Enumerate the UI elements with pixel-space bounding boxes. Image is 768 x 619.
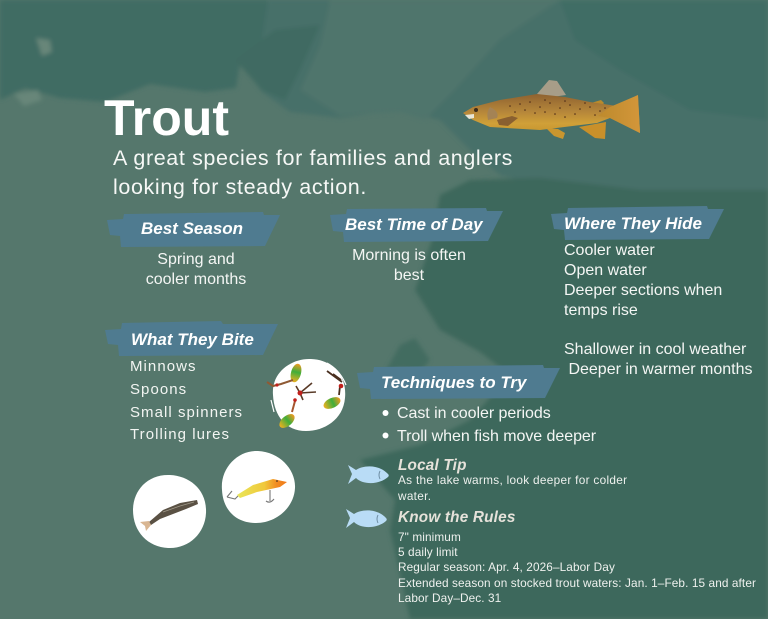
image: minnow	[133, 475, 206, 548]
text: where they hide: temps rise	[564, 302, 638, 319]
text: local tip: water.	[398, 488, 431, 502]
banner: where they hide	[551, 206, 724, 240]
heading: best season: Best Season	[141, 219, 243, 238]
text: best time of day: Morning is often	[352, 247, 466, 264]
text: seasonal depth: Deeper in warmer months	[568, 361, 753, 378]
text: where they hide: Open water	[564, 262, 647, 279]
text: know the rules: Labor Day–Dec. 31	[398, 591, 501, 605]
list: techniques: Troll when fish move deeper	[397, 428, 596, 444]
list: lures	[130, 358, 243, 443]
image: lure	[222, 451, 296, 523]
text: where they hide: Cooler water	[564, 242, 655, 259]
bullets	[382, 410, 388, 438]
text: local tip: As the lake warms, look deeper for colder	[398, 473, 627, 487]
text: know the rules: Regular season: Apr. 4, 2026–Labor Day	[398, 560, 615, 574]
icon: fish, know the rules	[346, 509, 387, 528]
heading: know the rules: Know the Rules	[398, 509, 516, 526]
panel: techniques to try	[357, 365, 596, 444]
banner: best season	[107, 212, 280, 247]
list: lures: Trolling lures	[130, 426, 230, 443]
text: best season: Spring and	[157, 251, 235, 268]
text: seasonal depth: Shallower in cool weather	[564, 341, 746, 358]
text: seasonal depth	[564, 341, 753, 378]
title: Trout	[104, 90, 229, 146]
text: best season: cooler months	[146, 271, 246, 288]
list: techniques	[397, 405, 596, 444]
illustration: brown trout	[463, 80, 640, 139]
banner: what they bite	[105, 321, 278, 356]
list: lures: Spoons	[130, 381, 187, 398]
heading: best time of day: Best Time of Day	[345, 215, 483, 234]
heading: techniques to try: Techniques to Try	[381, 373, 526, 392]
heading: what they bite: What They Bite	[131, 330, 254, 349]
text: best season	[146, 251, 246, 288]
intro text: looking for steady action.	[113, 174, 367, 198]
panel: best season	[107, 212, 280, 288]
text: know the rules: Extended season on stocked trout waters: Jan. 1–Feb. 15 and after	[398, 576, 756, 590]
text: know the rules: 5 daily limit	[398, 545, 458, 559]
text: know the rules	[398, 530, 756, 605]
text: know the rules: 7" minimum	[398, 530, 461, 544]
list: techniques: Cast in cooler periods	[397, 405, 551, 422]
list: lures: Small spinners	[130, 404, 243, 421]
icon: fish, local tip	[348, 465, 389, 484]
text: where they hide: Deeper sections when	[564, 282, 722, 299]
text: where they hide	[564, 242, 722, 319]
intro text: A great species for families and anglers	[113, 146, 513, 170]
banner: best time of day	[330, 208, 503, 242]
banner: techniques to try	[357, 365, 560, 399]
panel: what they bite	[105, 321, 278, 443]
heading: where they hide: Where They Hide	[564, 214, 702, 233]
text: best time of day: best	[394, 267, 424, 284]
image: spinners	[266, 359, 346, 431]
panel: best time of day	[330, 208, 503, 284]
intro text	[113, 146, 513, 198]
panel: where they hide	[551, 206, 753, 378]
heading: local tip: Local Tip	[398, 457, 467, 474]
text: local tip	[398, 473, 627, 502]
list: lures: Minnows	[130, 358, 197, 375]
text: best time of day	[352, 247, 466, 284]
